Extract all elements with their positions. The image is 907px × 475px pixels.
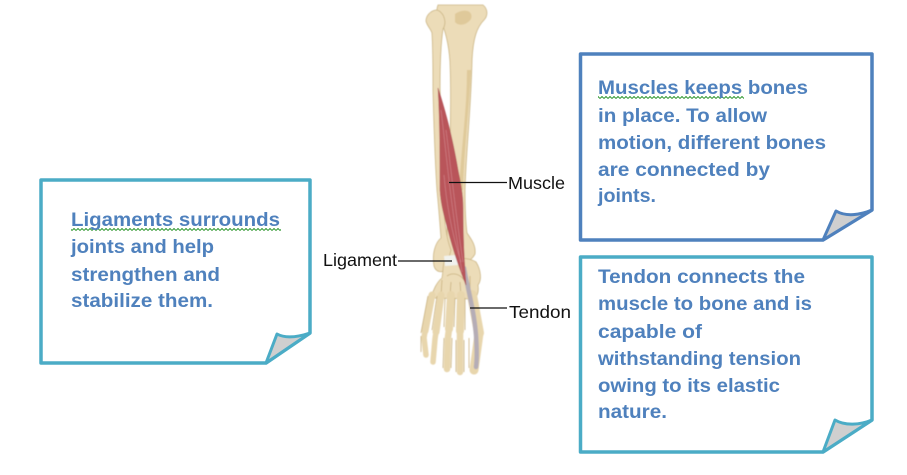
tarsal joints (441, 274, 470, 296)
panel: ligaments note (41, 180, 310, 363)
icon: page curl (823, 210, 872, 240)
text: muscles (597, 78, 826, 207)
panel: tendon note (580, 257, 872, 452)
text: tendon: capable of (598, 322, 703, 343)
text: muscles: in place. To allow (598, 106, 767, 127)
label: ligament: Ligament (323, 250, 397, 270)
icon: page curl (823, 420, 872, 452)
label: tendon: Tendon (509, 302, 571, 322)
ligament highlight (444, 255, 458, 266)
tibia bone (437, 5, 487, 262)
tendon (464, 268, 477, 367)
label: ligament (323, 250, 452, 270)
illustration: lower leg and foot anatomy (421, 5, 487, 372)
text: tendon: nature. (598, 402, 667, 423)
icon: page curl (266, 333, 310, 363)
text: ligaments (70, 210, 281, 312)
tarsal bones (431, 258, 480, 299)
metatarsal bones and toes (421, 295, 479, 372)
text: tendon: Tendon connects the (598, 267, 805, 288)
muscle (438, 88, 466, 285)
text: ligaments: joints and help (70, 237, 214, 258)
label: muscle: Muscle (508, 173, 565, 193)
text: muscles: motion, different bones (598, 133, 826, 154)
label: muscle (449, 173, 565, 193)
text: tendon (597, 267, 812, 423)
tibia shading (455, 11, 472, 190)
text: ligaments: strengthen and (71, 265, 220, 286)
text: muscles: joints. (597, 186, 656, 207)
text: muscles: are connected by (598, 160, 770, 181)
text: muscles: Muscles keeps bones (598, 78, 808, 99)
text: tendon: muscle to bone and is (598, 294, 812, 315)
fibula bone (426, 10, 451, 272)
panel: muscles note (580, 54, 872, 240)
text: tendon: owing to its elastic (598, 376, 780, 397)
text: tendon: withstanding tension (597, 349, 801, 370)
text: ligaments: Ligaments surrounds (71, 210, 280, 231)
text: ligaments: stabilize them. (71, 291, 213, 312)
label: tendon (470, 302, 571, 322)
